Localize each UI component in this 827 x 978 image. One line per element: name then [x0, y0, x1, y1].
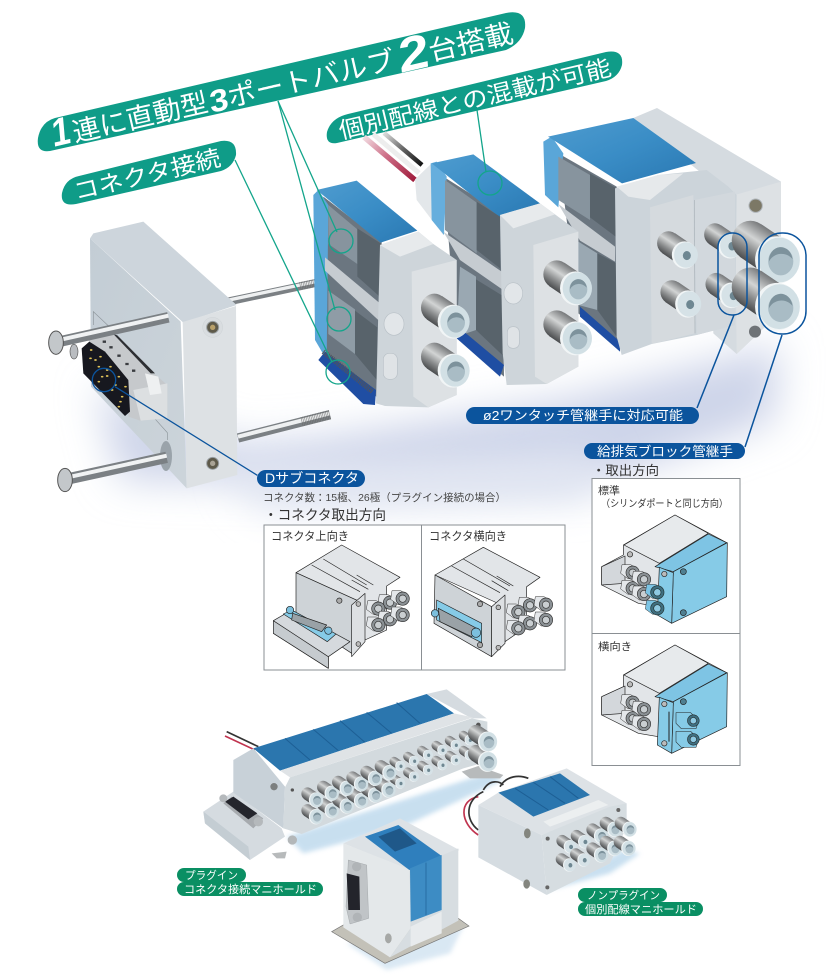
body — [343, 818, 459, 957]
heading: connector direction: ・コネクタ取出方向 — [264, 507, 386, 523]
fittings, bottom row — [301, 745, 497, 824]
label: sideways connector: コネクタ横向き — [429, 529, 507, 543]
connector mounting plate with tie rods — [49, 222, 330, 492]
diagram: standard outlet — [602, 515, 727, 623]
plate body — [90, 222, 237, 488]
banner: 個別配線との混載が可能: 個別配線との混載が可能 — [336, 54, 614, 144]
label: ノンプラグイン 個別配線マニホールド — [578, 888, 703, 916]
unit 1: plug-in connector valve — [313, 181, 470, 407]
wires — [225, 732, 258, 750]
product: compact plug-in manifold — [332, 818, 469, 970]
diagram: upward connector — [273, 545, 409, 668]
label: ø2ワンタッチ管継手に対応可能 — [466, 407, 699, 424]
blue callouts on fittings — [697, 233, 806, 447]
diagram: sideways outlet — [602, 645, 727, 753]
D-sub connector — [346, 860, 369, 924]
heading: outlet direction: ・取出方向 — [592, 463, 659, 478]
label: Dサブコネクタ: Dサブコネクタ — [265, 470, 359, 486]
banner: 1連に直動型3ポートバルブ2台搭載: 台搭載 — [426, 18, 516, 67]
label: standard: 標準 — [598, 484, 620, 497]
wire loops — [464, 776, 528, 835]
blue callout circle and leader — [92, 368, 257, 475]
diagram: sideways connector — [431, 547, 553, 657]
banner: 1連に直動型3ポートバルブ2台搭載: 2 — [396, 23, 431, 84]
panel: outlet direction diagrams — [592, 478, 740, 766]
unit 2: individual wiring valve — [415, 154, 592, 385]
label: ノンプラグイン 個別配線マニホールド: 個別配線マニホールド — [585, 903, 697, 916]
label: プラグイン コネクタ接続マニホールド: コネクタ接続マニホールド — [184, 882, 317, 896]
metal connector shell — [82, 334, 167, 421]
unit 3: rear manifold with supply block — [543, 108, 800, 355]
banner: コネクタ接続: コネクタ接続 — [71, 145, 223, 205]
text: connector count: コネクタ数：15極、26極（プラグイン接続の場合） — [263, 491, 506, 504]
wires — [364, 133, 422, 180]
product: long plug-in manifold — [203, 689, 503, 860]
front tie rods and screw heads — [49, 316, 168, 492]
banner: 1連に直動型3ポートバルブ2台搭載: 連に直動型 — [70, 88, 211, 148]
banner: 1連に直動型3ポートバルブ2台搭載: 3 — [208, 81, 230, 120]
banner: 1連に直動型3ポートバルブ2台搭載 — [38, 12, 525, 156]
body — [478, 768, 627, 895]
product: non plug-in individual wiring manifold — [464, 768, 640, 895]
valve units (exploded view) — [313, 108, 800, 407]
fittings, top row — [301, 725, 497, 808]
back tie rods — [229, 279, 330, 438]
shadow — [287, 773, 503, 853]
panel: connector direction diagrams — [264, 525, 565, 670]
blue floor shadow behind main product — [95, 345, 780, 510]
shadow — [347, 927, 463, 970]
label: プラグイン コネクタ接続マニホールド — [177, 868, 323, 896]
shadow — [550, 850, 640, 890]
label: same direction as cylinder port: （シリンダポートと同じ方向） — [601, 497, 728, 510]
banner: 1連に直動型3ポートバルブ2台搭載: ポートバルブ — [225, 45, 398, 113]
label: ø2ワンタッチ管継手に対応可能: ø2ワンタッチ管継手に対応可能 — [483, 408, 683, 423]
banner: 1連に直動型3ポートバルブ2台搭載: 1 — [50, 109, 72, 156]
label: 給排気ブロック管継手: 給排気ブロック管継手 — [597, 444, 733, 459]
manifold body — [203, 689, 503, 860]
fittings — [556, 817, 637, 872]
label: プラグイン コネクタ接続マニホールド: プラグイン — [185, 868, 238, 882]
teal leader lines and circles — [235, 101, 502, 384]
label: sideways: 横向き — [598, 640, 632, 653]
label: upward connector: コネクタ上向き — [271, 529, 349, 543]
label: ノンプラグイン 個別配線マニホールド: ノンプラグイン — [587, 888, 660, 902]
bracket — [332, 918, 469, 963]
